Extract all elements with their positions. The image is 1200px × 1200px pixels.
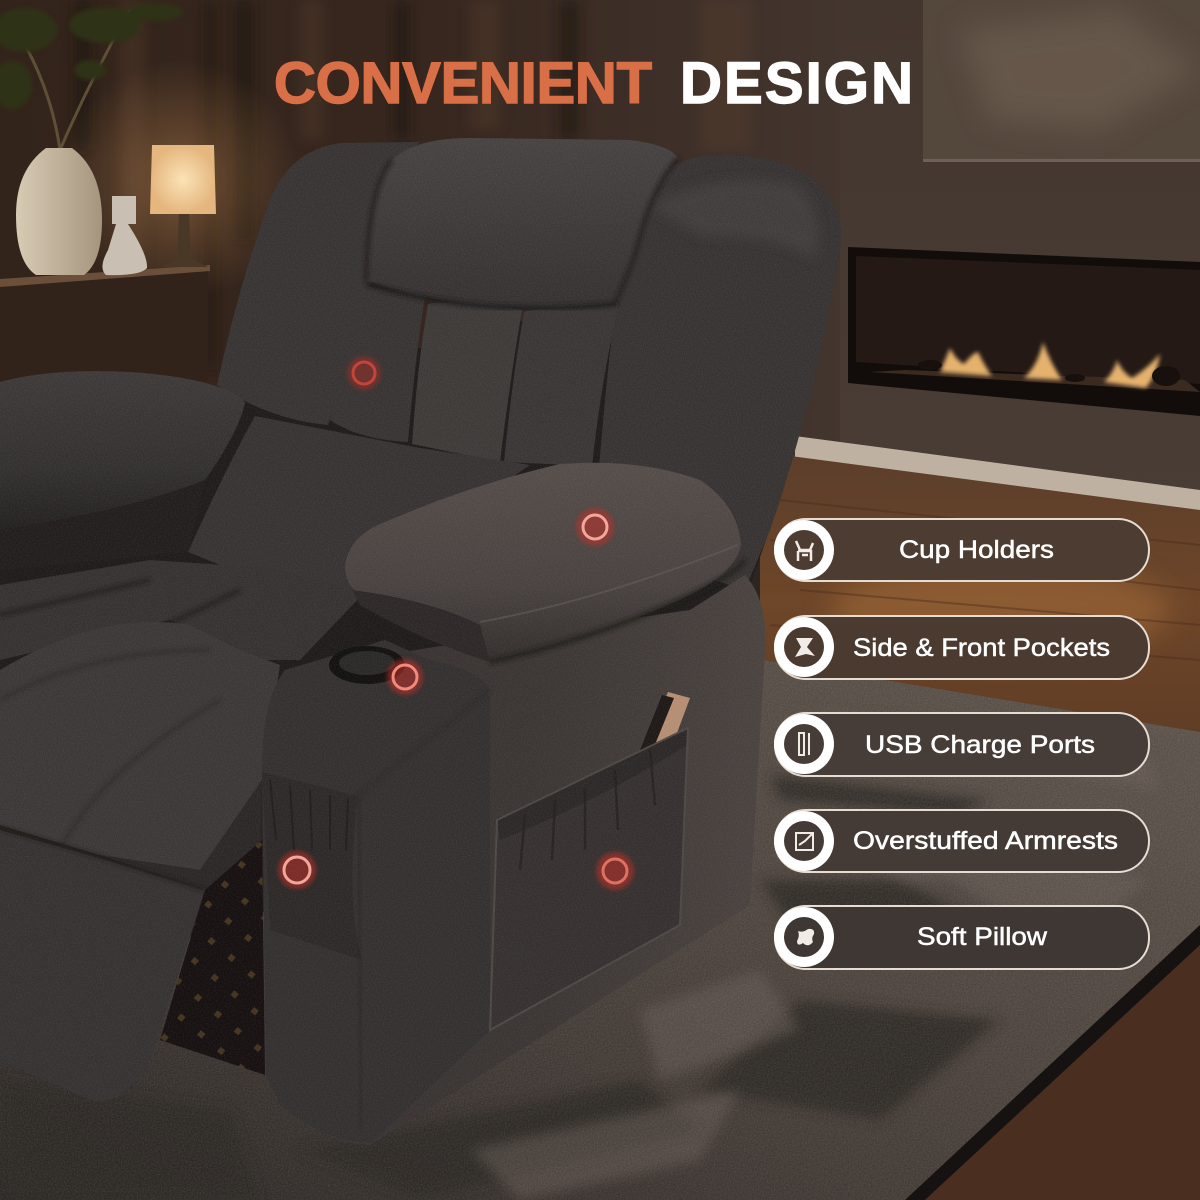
right wing (598, 155, 841, 590)
leg cushion (0, 622, 280, 870)
baseboard (795, 436, 1200, 511)
seat cushions (0, 560, 365, 660)
headrest cushion (366, 138, 678, 309)
side pocket (490, 728, 688, 1030)
red hotspot: cup holder (387, 659, 423, 695)
dark mesh under footrest (160, 840, 265, 1075)
left wing (217, 142, 420, 425)
feature pill: Side & Front Pockets (774, 616, 1149, 679)
icon: pillow (797, 929, 814, 945)
feature pill: Overstuffed Armrests (774, 810, 1149, 872)
armrest side body (262, 575, 765, 1145)
feature pill: Soft Pillow (774, 906, 1149, 969)
wall painting (923, 0, 1200, 162)
title (274, 51, 913, 116)
left armrest pillow (0, 371, 245, 530)
feature pill: USB Charge Ports (774, 713, 1149, 776)
background wall right (840, 0, 1200, 510)
feature pill: Overstuffed Armrests: Overstuffed Armrests (853, 827, 1118, 855)
fireplace with flames (848, 247, 1200, 416)
lumbar cushions (330, 284, 618, 466)
side table with lamp, vase and plant (0, 3, 216, 384)
red hotspot: armrest (576, 508, 614, 546)
feature pill: Cup Holders: Cup Holders (899, 536, 1054, 564)
recliner chair (0, 138, 841, 1145)
icon: chair with cup holder (796, 541, 813, 561)
footrest (0, 830, 205, 1102)
red hotspot: lumbar (347, 356, 381, 390)
red hotspot: front pocket (278, 851, 316, 889)
shadow base behind chair (0, 300, 780, 800)
feature pill: Side & Front Pockets: Side & Front Pockets (853, 634, 1110, 662)
feature pill: USB Charge Ports: USB Charge Ports (865, 731, 1095, 759)
title: DESIGN (680, 51, 913, 116)
right armrest pillow (345, 463, 741, 662)
background wall left with curtains (0, 0, 880, 520)
rug (0, 660, 1200, 1200)
icon: pockets (795, 638, 815, 657)
side table (0, 270, 208, 384)
lower back cushion (188, 416, 530, 592)
cup holder (329, 646, 405, 684)
red hotspot: side pocket (596, 852, 634, 890)
arm front panel (262, 640, 490, 1142)
vase (16, 148, 102, 275)
ceramic figurine (102, 196, 147, 275)
wood floor (760, 452, 1200, 1200)
feature pill: Soft Pillow: Soft Pillow (917, 923, 1048, 951)
feature pill: Cup Holders (774, 519, 1149, 581)
icon: armrest (796, 833, 813, 850)
icon: USB ports (799, 733, 809, 755)
phone in pocket (638, 692, 690, 758)
table lamp (150, 145, 216, 267)
plant (0, 3, 183, 150)
title: CONVENIENT (274, 51, 652, 116)
